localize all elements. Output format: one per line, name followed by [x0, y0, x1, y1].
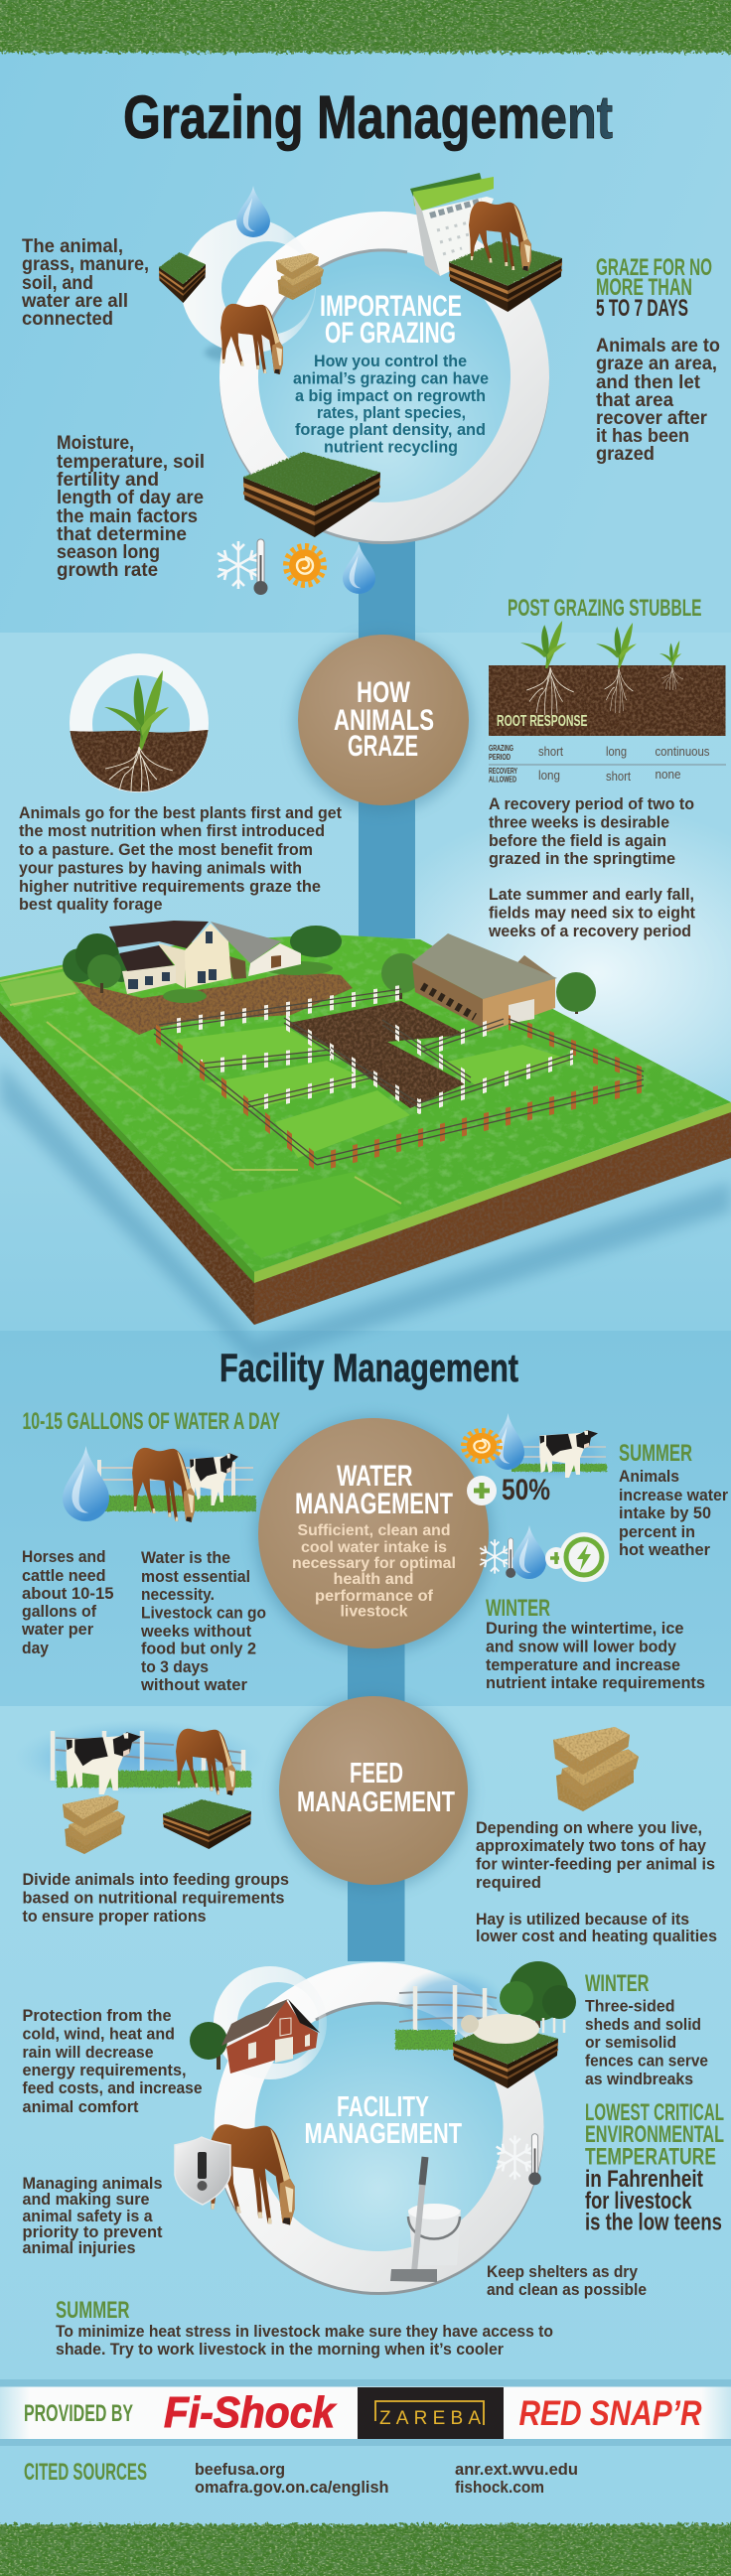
text: winter water intake: [486, 1595, 705, 1692]
text: recovery period: three weeks is desirable: [489, 812, 669, 832]
text: growth factors: temperature, soil: [57, 452, 205, 473]
text: divide animals: [22, 1870, 289, 1926]
text: protection: cold, wind, heat and: [22, 2024, 175, 2044]
text: winter windbreaks: or semisolid: [585, 2033, 676, 2052]
text: protection: animal comfort: [22, 2097, 139, 2116]
cited sources: anr.ext.wvu.edu: [455, 2460, 578, 2479]
callout: lowest critical temperature: for livestock: [585, 2188, 692, 2215]
illustration: farm on isometric land block: [0, 921, 731, 1365]
cited sources: CITED SOURCES: [24, 2459, 147, 2486]
text: recovery period: grazed in the springtime: [489, 849, 675, 868]
farm shadow: [0, 1063, 731, 1365]
panel: feed management circle: FEED: [350, 1758, 403, 1789]
panel: how animals graze circle: HOW: [357, 676, 410, 709]
text: horses and cattle need: Horses and: [22, 1547, 105, 1566]
background glow behind farm: [358, 804, 731, 1142]
table: grazing period and recovery: short: [606, 769, 631, 784]
text: growth factors: [57, 433, 205, 581]
ring heading: FACILITY: [337, 2091, 429, 2123]
text: growth factors: growth rate: [57, 560, 158, 581]
text: recovery period: [488, 794, 695, 940]
text: winter windbreaks: as windbreaks: [585, 2070, 693, 2088]
text: connected: [21, 236, 149, 330]
text: water is the most essential: most essential: [141, 1567, 250, 1586]
text: animal safety: Managing animals: [22, 2174, 163, 2193]
text: growth factors: that determine: [57, 524, 187, 545]
text: animal safety: animal safety is a: [22, 2207, 153, 2225]
cited sources: omafra.gov.on.ca/english: [195, 2478, 389, 2497]
text: connected: water are all: [21, 291, 128, 312]
text: connected: connected: [22, 309, 113, 330]
icon: hay bales: [276, 253, 324, 300]
illustration: cow, horse, hay and turf: [15, 1720, 263, 1854]
text: animals go for the best plants: to a pasture. Get the most benefit from: [19, 840, 313, 859]
text: hay requirements: Hay is utilized because of its: [476, 1910, 689, 1929]
text: animal safety: [22, 2174, 163, 2257]
text: animals go for the best plants: higher nutritive requirements graze the: [19, 877, 321, 896]
text: recovery period: fields may need six to eight: [489, 904, 695, 922]
field surface: [0, 934, 731, 1272]
heading: 10-15 gallons: 10-15 GALLONS OF WATER A DAY: [22, 1408, 280, 1435]
text: recovery instruction: [596, 336, 720, 465]
ring heading: [304, 2091, 462, 2150]
table: grazing period and recovery: long: [538, 768, 560, 783]
farmhouse: [87, 921, 301, 994]
background: upper section: [0, 40, 731, 633]
callout: lowest critical temperature: [585, 2099, 724, 2236]
text: animal safety: animal injuries: [22, 2238, 135, 2257]
ring description: [293, 352, 489, 457]
icon: calendar: [410, 173, 494, 276]
bottom grass strip: [0, 2524, 731, 2576]
table: grazing period and recovery: PERIOD: [489, 753, 511, 762]
text: connected: grass, manure,: [22, 254, 149, 275]
logo: Zareba: [358, 2387, 504, 2439]
text: recovery instruction: grazed: [596, 444, 655, 465]
panel: water management circle: Sufficient, clean and: [298, 1522, 451, 1539]
text: water is the most essential: [140, 1548, 266, 1694]
back pasture and dirt yard: [73, 971, 353, 1035]
background: pasture section: [0, 633, 731, 1331]
panel: water management circle: livestock: [340, 1603, 408, 1621]
table: grazing period and recovery: [489, 744, 726, 785]
panel: how animals graze circle: [294, 634, 473, 812]
text: recovery period: Late summer and early fall,: [489, 885, 694, 904]
heading: facility management: Facility Management: [219, 1347, 518, 1390]
vertical connector stem: grazing: [359, 536, 415, 938]
text: growth factors: season long: [57, 542, 160, 563]
icon: water drop: [343, 543, 375, 594]
icon: plant in circle: [70, 653, 209, 792]
text: horses and cattle need: [21, 1547, 114, 1657]
text: summer heat stress: shade. Try to work livestock in the morning when it’s cooler: [56, 2340, 504, 2359]
ring description: animal’s grazing can have: [293, 369, 489, 387]
panel: facility management ring: [175, 1961, 576, 2295]
big ring: [215, 1962, 544, 2295]
text: protection: Protection from the: [22, 2006, 171, 2025]
text: summer heat stress: [56, 2297, 553, 2359]
text: summer water intake: Animals: [619, 1467, 679, 1486]
panel: water management circle: MANAGEMENT: [295, 1488, 453, 1520]
icon: hay bales: [553, 1727, 639, 1811]
text: water is the most essential: Water is the: [141, 1548, 230, 1567]
top grass strip: [0, 0, 731, 53]
icon: small turf block: [159, 252, 206, 303]
icon: sheep with fence on turf: [394, 1961, 576, 2088]
ring heading: OF GRAZING: [325, 317, 456, 350]
text: winter water intake: During the wintertime, ice: [486, 1619, 683, 1638]
ring heading: MANAGEMENT: [304, 2118, 462, 2150]
table: grazing period and recovery: none: [656, 767, 681, 782]
icon: grazing horse: [220, 304, 283, 374]
table: grazing period and recovery: GRAZING: [489, 744, 513, 753]
cited sources: beefusa.org: [195, 2460, 285, 2479]
text: water is the most essential: to 3 days: [141, 1657, 209, 1676]
icon: summer cow, sun and drop: [464, 1413, 614, 1483]
panel: water management circle: performance of: [315, 1588, 434, 1605]
text: summer water intake: percent in: [619, 1522, 695, 1541]
text: summer water intake: intake by 50: [619, 1503, 711, 1522]
large barn: [412, 933, 557, 1032]
vertical connector stem: facility: [348, 1639, 405, 1961]
text: summer heat stress: To minimize heat stress in livestock make sure they have access to: [56, 2322, 553, 2341]
logo: Red Snap'r: RED SNAP’R: [518, 2394, 702, 2433]
text: hay requirements: approximately two tons of hay: [476, 1836, 707, 1855]
panel: sponsor band: [0, 2379, 731, 2446]
panel: importance of grazing ring: [159, 173, 562, 544]
small white ring: [181, 218, 316, 354]
text: recovery instruction: graze an area,: [596, 354, 717, 374]
text: recovery period: before the field is again: [489, 831, 666, 850]
big white ring: [219, 212, 549, 544]
chart: root response: [489, 621, 725, 736]
text: winter water intake: temperature and increase: [486, 1655, 680, 1674]
icon: turf block, bottom of ring: [243, 452, 380, 537]
text: recovery instruction: Animals are to: [596, 336, 720, 357]
icon: bucket and mop: [390, 2157, 461, 2282]
text: recovery instruction: that area: [596, 390, 673, 411]
logo: Zareba: ZAREBA: [379, 2408, 481, 2429]
icon: snowflake and thermometer: [218, 539, 268, 595]
text: divide animals: based on nutritional requirements: [22, 1889, 284, 1907]
text: water is the most essential: without water: [140, 1675, 247, 1694]
fences: [154, 985, 644, 1172]
text: summer water intake: SUMMER: [619, 1440, 692, 1467]
panel: water management circle: cool water intake is: [301, 1539, 447, 1556]
light paddocks: [173, 1026, 573, 1158]
icon: barn and tree: [190, 1999, 320, 2074]
text: keep shelters dry: and clean as possible: [487, 2280, 647, 2299]
text: animals go for the best plants: best quality forage: [19, 895, 163, 914]
text: horses and cattle need: day: [22, 1639, 49, 1657]
panel: how animals graze circle: GRAZE: [348, 730, 418, 763]
small ring: [214, 1966, 327, 2079]
text: recovery period: A recovery period of two to: [489, 794, 694, 813]
farm lanes: [0, 967, 401, 1204]
text: animals go for the best plants: the most nutrition when first introduced: [19, 821, 325, 840]
background: facility section: [0, 1331, 731, 1706]
panel: water management circle: [254, 1416, 493, 1654]
icon: large turf block with horse: [449, 202, 562, 312]
text: protection: feed costs, and increase: [22, 2078, 203, 2097]
text: divide animals: Divide animals into feeding groups: [22, 1870, 289, 1889]
trees and bushes near house: [63, 926, 596, 1014]
text: horses and cattle need: water per: [21, 1620, 93, 1639]
text: protection: [22, 2006, 203, 2116]
text: connected: The animal,: [22, 236, 123, 257]
text: growth factors: the main factors: [57, 506, 198, 527]
text: hay requirements: Depending on where you live,: [476, 1818, 702, 1837]
text: winter windbreaks: Three-sided: [585, 1996, 675, 2016]
icon: horse with safety shield: [175, 2124, 295, 2225]
text: horses and cattle need: about 10-15: [22, 1584, 113, 1603]
ring heading: [320, 290, 462, 350]
background: lower section: [0, 1706, 731, 2576]
cited sources: fishock.com: [455, 2478, 544, 2497]
text: protection: rain will decrease: [22, 2043, 153, 2062]
text: keep shelters dry: [487, 2262, 647, 2299]
text: winter water intake: and snow will lower body: [486, 1637, 677, 1656]
text: divide animals: to ensure proper rations: [22, 1907, 207, 1926]
panel: water management circle: WATER: [337, 1460, 413, 1493]
logo: Fi-Shock: Fi-Shock: [164, 2388, 337, 2437]
stat: 50 percent: 50%: [502, 1474, 550, 1506]
title: Grazing Management: [123, 83, 613, 151]
text: horses and cattle need: gallons of: [22, 1602, 96, 1621]
text: growth factors: length of day are: [57, 488, 204, 508]
icon: snowflake and thermometer: [497, 2134, 541, 2185]
text: protection: energy requirements,: [22, 2061, 187, 2079]
text: winter windbreaks: WINTER: [585, 1970, 650, 1997]
table: grazing period and recovery: continuous: [656, 744, 710, 759]
ring description: a big impact on regrowth: [295, 386, 486, 405]
text: hay requirements: lower cost and heating qualities: [476, 1927, 717, 1945]
panel: feed management circle: [276, 1695, 471, 1890]
text: summer water intake: hot weather: [619, 1540, 710, 1559]
text: winter water intake: nutrient intake requirements: [486, 1673, 705, 1692]
icon: winter snowflake, drop and energy: [480, 1525, 609, 1582]
icon: plus badge: [467, 1476, 497, 1505]
text: recovery instruction: and then let: [596, 372, 701, 393]
ring description: How you control the: [314, 352, 467, 370]
illustration: horse and cow with water drop: [63, 1440, 268, 1522]
text: summer heat stress: SUMMER: [56, 2297, 129, 2324]
soil faces: [0, 1003, 731, 1325]
text: water is the most essential: Livestock can go: [141, 1603, 266, 1623]
ring description: nutrient recycling: [324, 437, 458, 457]
text: recovery period: weeks of a recovery period: [488, 922, 691, 940]
text: animals go for the best plants: Animals go for the best plants first and get: [19, 803, 342, 822]
table: grazing period and recovery: long: [606, 744, 627, 759]
text: water is the most essential: necessity.: [141, 1585, 215, 1604]
panel: feed management circle: MANAGEMENT: [297, 1787, 455, 1818]
text: recovery instruction: it has been: [596, 426, 689, 447]
ring heading: IMPORTANCE: [320, 290, 462, 323]
dirt paddock: [284, 1001, 466, 1108]
table: grazing period and recovery: ALLOWED: [489, 775, 516, 785]
text: hay requirements: for winter-feeding per animal is: [476, 1855, 715, 1873]
text: horses and cattle need: cattle need: [22, 1566, 105, 1585]
table: grazing period and recovery: RECOVERY: [489, 767, 517, 776]
text: growth factors: Moisture,: [57, 433, 134, 454]
text: winter windbreaks: [585, 1970, 708, 2088]
text: recovery instruction: recover after: [596, 408, 708, 429]
text: keep shelters dry: Keep shelters as dry: [487, 2262, 638, 2281]
text: summer water intake: [619, 1440, 728, 1559]
text: hay requirements: [476, 1818, 717, 1945]
ring description: forage plant density, and: [295, 420, 486, 439]
cited sources: [24, 2459, 578, 2497]
table: grazing period and recovery: short: [538, 744, 563, 759]
callout: lowest critical temperature: in Fahrenheit: [585, 2166, 703, 2193]
text: animals go for the best plants: your pastures by having animals with: [19, 858, 302, 878]
panel: water management circle: necessary for optimal: [292, 1555, 456, 1572]
text: animal safety: priority to prevent: [22, 2222, 163, 2241]
panel: sponsor band: PROVIDED BY: [24, 2400, 133, 2427]
text: winter windbreaks: sheds and solid: [585, 2015, 701, 2034]
text: water is the most essential: food but only 2: [141, 1639, 256, 1658]
text: winter windbreaks: fences can serve: [585, 2052, 708, 2070]
ring description: rates, plant species,: [317, 403, 466, 422]
text: hay requirements: required: [476, 1873, 541, 1892]
callout: graze for no more than 5 to 7 days: [596, 254, 712, 322]
text: animals go for the best plants: [19, 803, 342, 914]
panel: how animals graze circle: ANIMALS: [334, 704, 434, 737]
icon: water drop: [236, 186, 270, 237]
text: water is the most essential: weeks without: [140, 1622, 251, 1641]
text: animal safety: and making sure: [22, 2190, 149, 2209]
text: winter water intake: WINTER: [486, 1595, 550, 1622]
chart: root response: ROOT RESPONSE: [497, 713, 588, 730]
icon: sun: [286, 546, 324, 585]
panel: water management circle: health and: [334, 1571, 413, 1588]
text: growth factors: fertility and: [57, 470, 159, 491]
text: connected: soil, and: [22, 273, 93, 294]
